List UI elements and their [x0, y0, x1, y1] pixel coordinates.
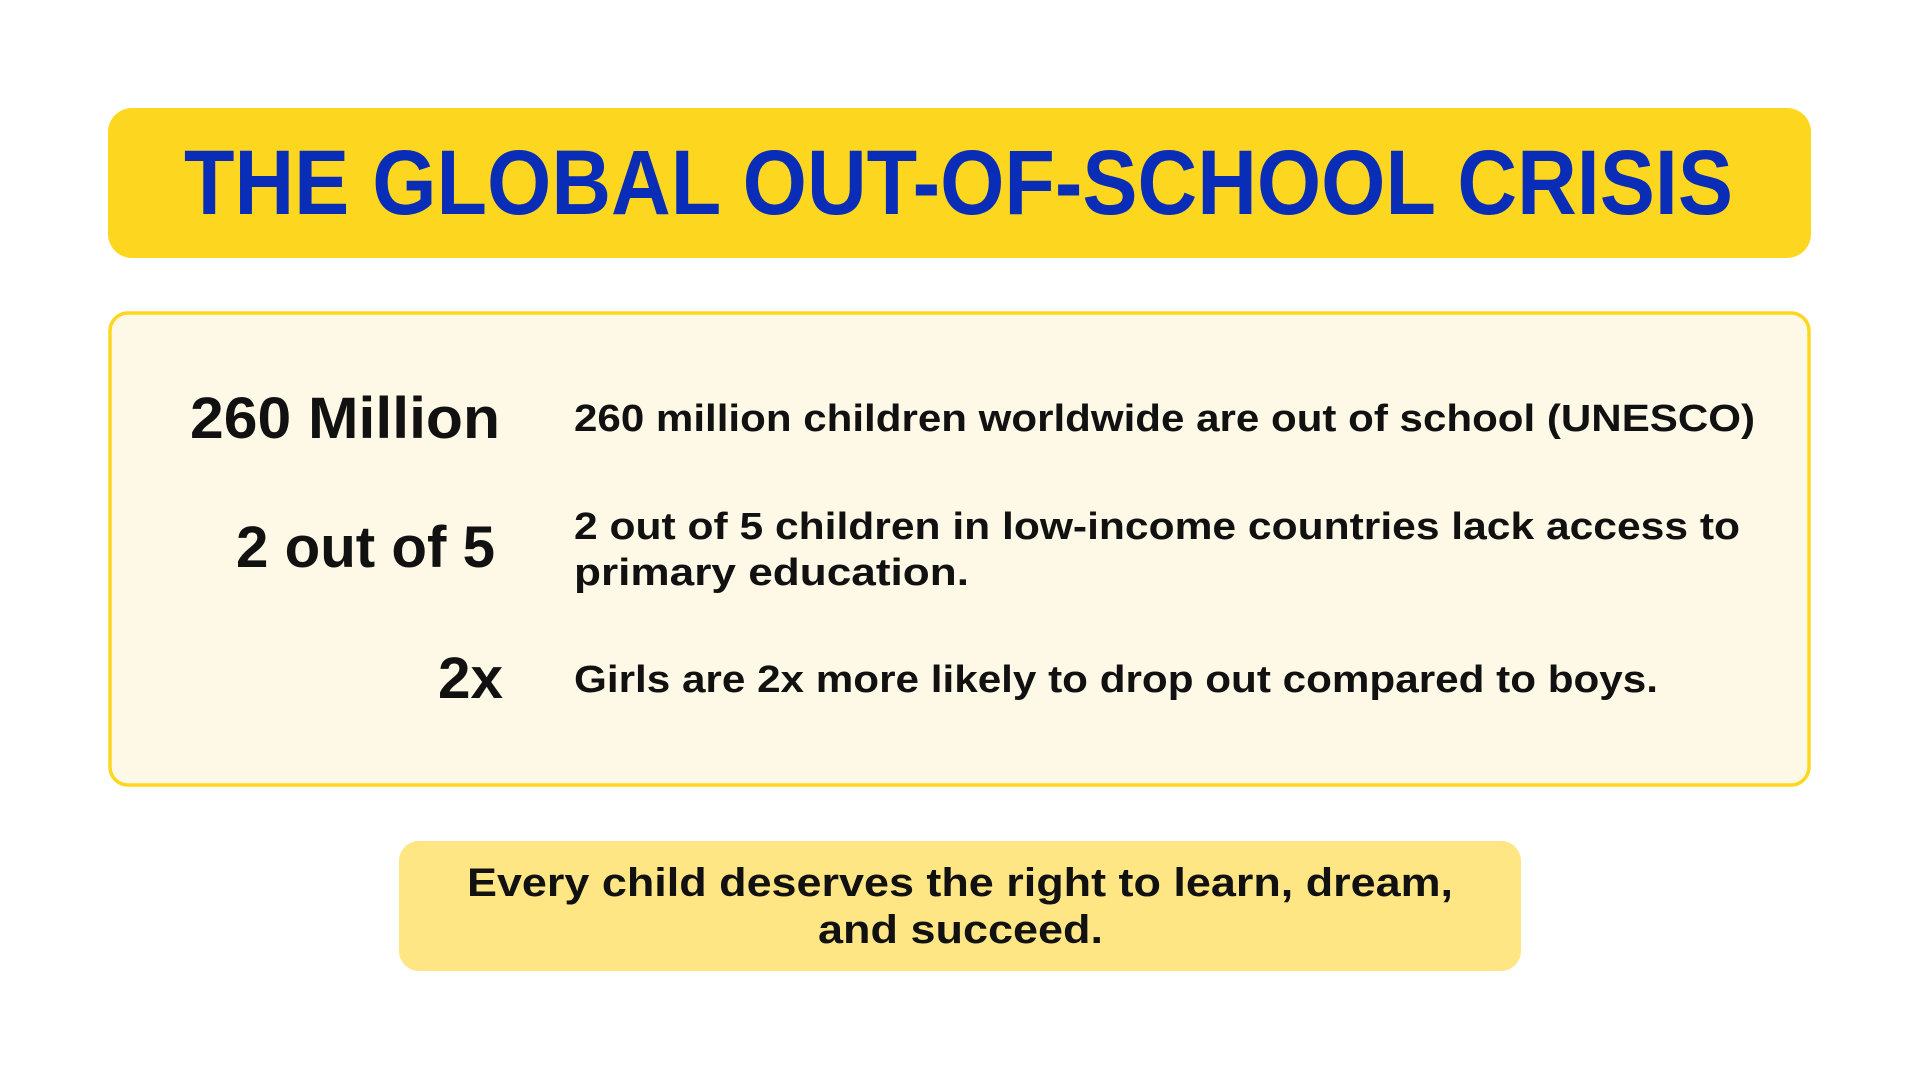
stat row: 260 Million: 260 Million: [190, 386, 500, 451]
panel: statistics: [110, 313, 1809, 785]
stat row: 2 out of 5: 2 out of 5 children in low-income countries lack access to: [574, 506, 1740, 548]
callout: closing message: [399, 841, 1521, 971]
stat row: 2x: 2x: [438, 646, 503, 711]
stat row: 260 Million: [190, 386, 1755, 451]
title: THE GLOBAL OUT-OF-SCHOOL CRISIS: [184, 132, 1733, 234]
stat row: 2x: [438, 646, 1658, 711]
stat row: 2 out of 5: [236, 506, 1740, 594]
stat row: 260 Million: 260 million children worldwide are out of school (UNESCO): [574, 398, 1755, 440]
callout: closing message: Every child deserves the right to learn, dream,: [467, 861, 1453, 905]
title banner: [108, 108, 1811, 258]
stat row: 2 out of 5: 2 out of 5: [236, 515, 495, 580]
stat row: 2x: Girls are 2x more likely to drop out compared to boys.: [574, 659, 1658, 701]
stat row: 2 out of 5: primary education.: [574, 552, 969, 594]
callout: closing message: and succeed.: [818, 908, 1103, 952]
